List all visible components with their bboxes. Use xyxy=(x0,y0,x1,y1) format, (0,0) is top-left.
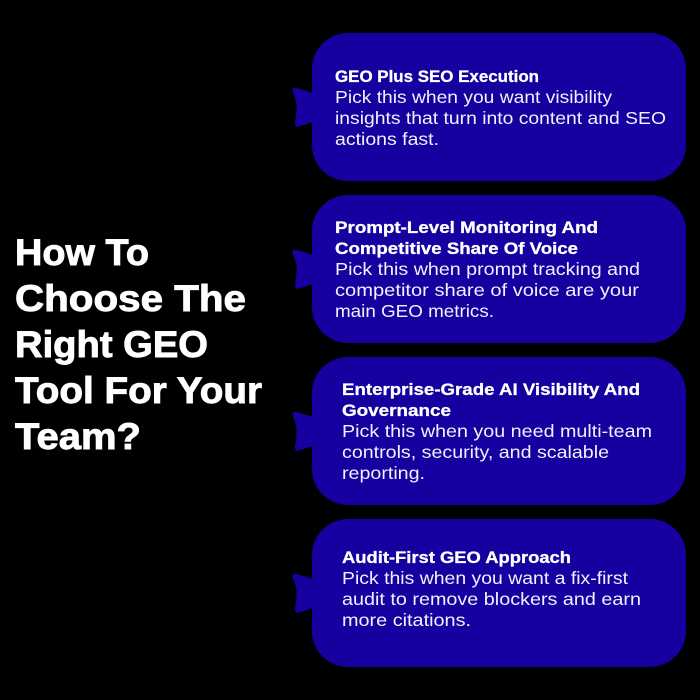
title: Tool For Your xyxy=(15,369,262,411)
text block: controls, security, and scalable xyxy=(342,442,609,462)
panel: Prompt-Level Monitoring xyxy=(292,195,686,343)
card background: Enterprise-Grade AI Visibility xyxy=(312,357,686,505)
heading: Prompt-Level Monitoring And xyxy=(335,219,598,237)
card background: Prompt-Level Monitoring xyxy=(312,195,686,343)
text block: main GEO metrics. xyxy=(335,301,494,321)
panel: GEO Plus SEO Execution xyxy=(292,33,686,181)
heading: Governance xyxy=(342,402,451,420)
icon: pointer tab xyxy=(292,88,313,127)
text block: insights that turn into content and SEO xyxy=(335,108,666,128)
text block xyxy=(342,568,641,630)
card background: GEO Plus SEO Execution xyxy=(312,33,686,181)
text block xyxy=(335,87,666,149)
text block: audit to remove blockers and earn xyxy=(342,589,641,609)
title xyxy=(15,231,262,457)
heading: GEO Plus SEO Execution xyxy=(335,68,539,86)
title: Choose The xyxy=(15,277,246,319)
icon: pointer tab xyxy=(292,250,313,289)
icon: pointer tab xyxy=(292,412,313,451)
heading: Enterprise-Grade AI Visibility And xyxy=(342,381,640,399)
heading xyxy=(335,219,598,258)
text block xyxy=(335,259,640,321)
text block: Pick this when you want visibility xyxy=(335,87,612,107)
text block: competitor share of voice are your xyxy=(335,280,639,300)
heading: Audit-First GEO Approach xyxy=(342,549,571,567)
heading: Competitive Share Of Voice xyxy=(335,240,578,258)
panel: Audit-First GEO Approach xyxy=(292,519,686,667)
text block: reporting. xyxy=(342,463,425,483)
icon: pointer tab xyxy=(292,574,313,613)
card background: Audit-First GEO Approach xyxy=(312,519,686,667)
title: How To xyxy=(15,231,149,273)
text block: more citations. xyxy=(342,610,471,630)
text block xyxy=(342,421,652,483)
panel: Enterprise-Grade AI Visibility xyxy=(292,357,686,505)
text block: actions fast. xyxy=(335,129,439,149)
text block: Pick this when prompt tracking and xyxy=(335,259,640,279)
text block: Pick this when you need multi-team xyxy=(342,421,652,441)
title: Team? xyxy=(15,415,141,457)
text block: Pick this when you want a fix-first xyxy=(342,568,628,588)
title: Right GEO xyxy=(15,323,208,365)
heading xyxy=(342,381,640,420)
